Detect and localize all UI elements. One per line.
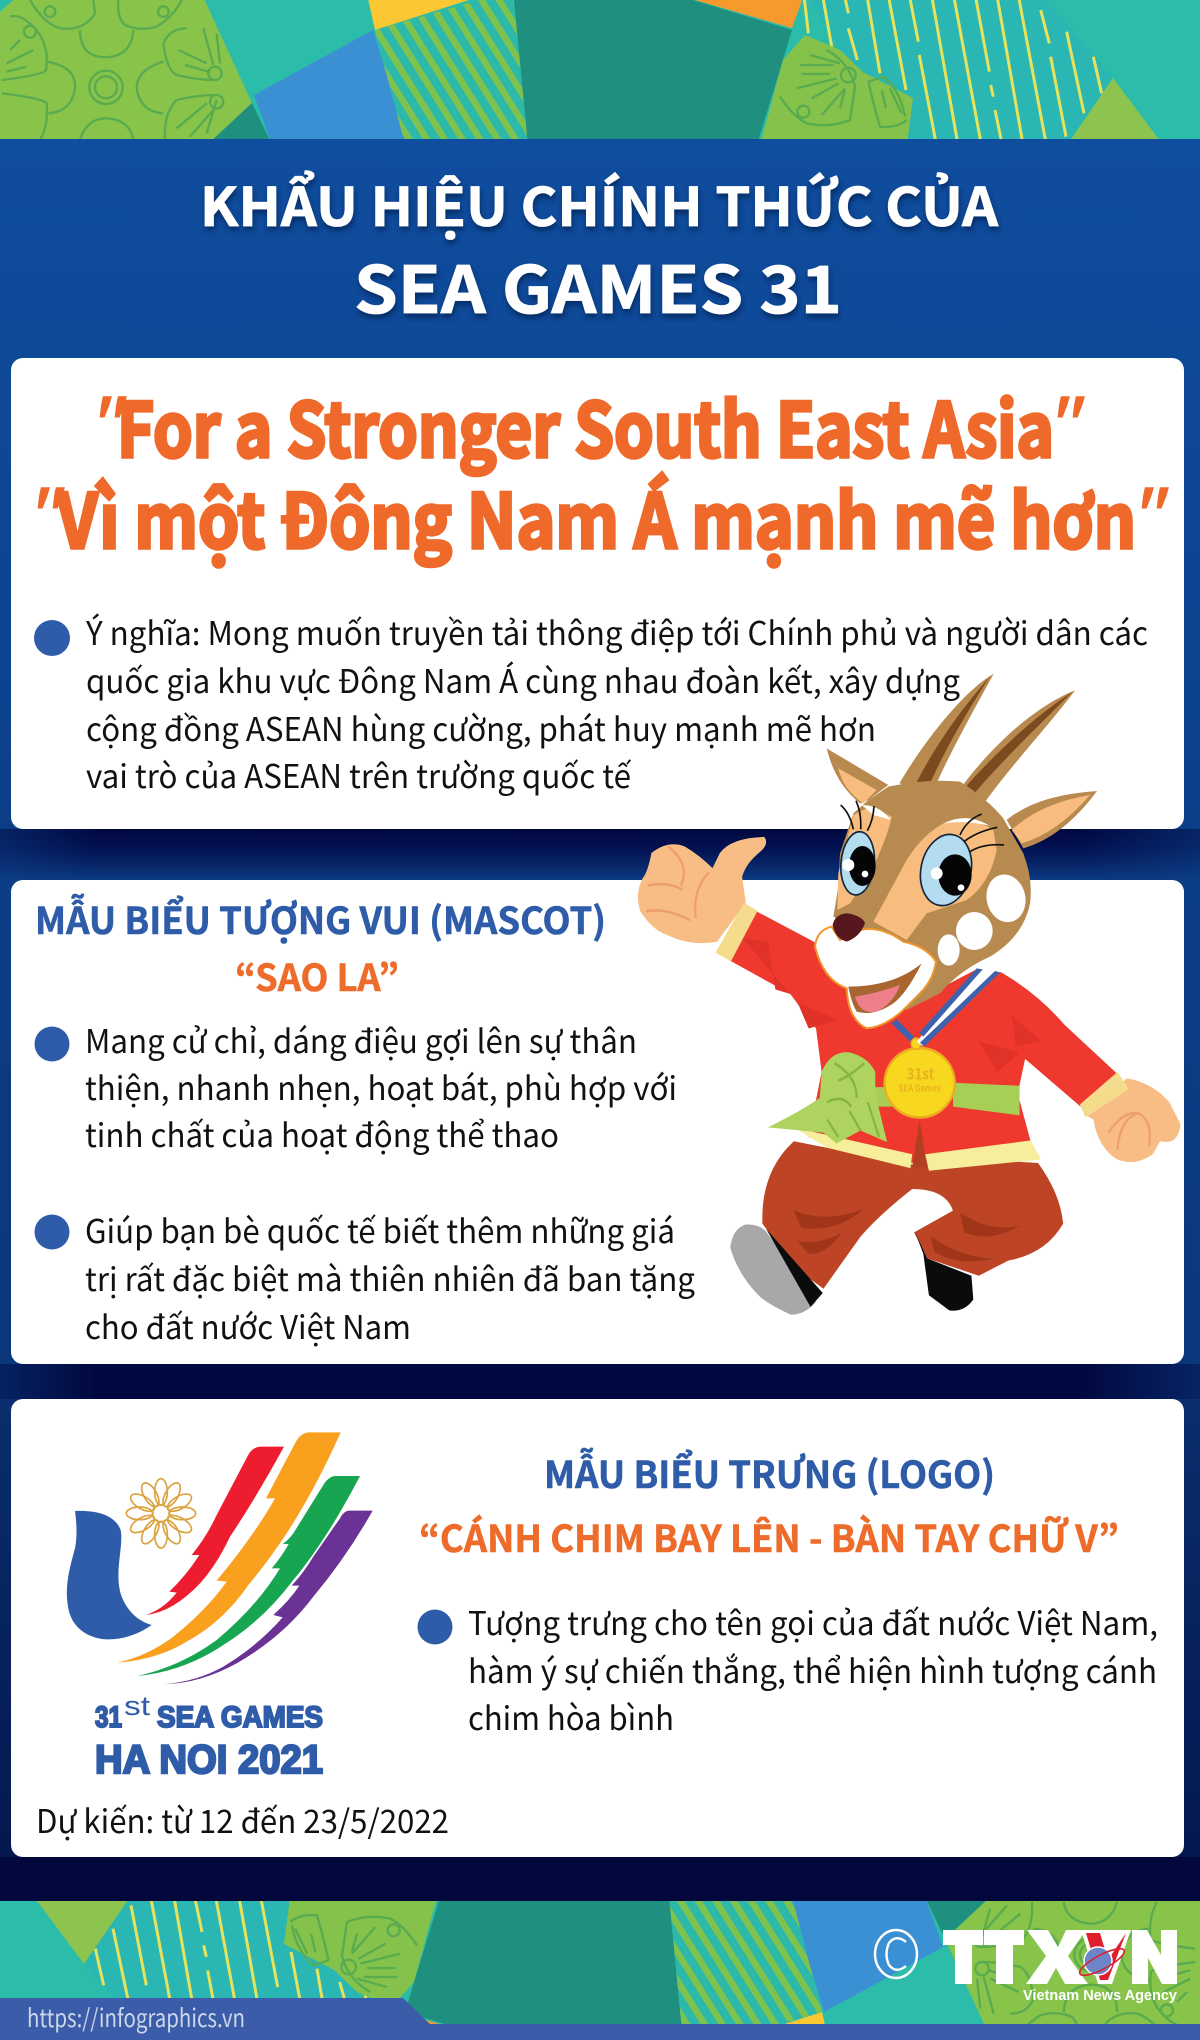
bottom footer strip xyxy=(0,1998,1200,2040)
bullet two xyxy=(34,1214,70,1250)
thumb-up hand xyxy=(638,837,766,943)
bullet two text: cho đất nước Việt Nam xyxy=(85,1302,411,1349)
logo heading: MẪU BIỂU TRƯNG (LOGO) xyxy=(544,1445,995,1499)
mouth xyxy=(848,963,922,1013)
medal text xyxy=(898,1063,941,1095)
meaning bullet xyxy=(34,620,70,656)
bullet one xyxy=(34,1026,70,1062)
slogan heading: " xyxy=(86,374,127,461)
source url: https://infographics.vn xyxy=(27,1999,245,2035)
hems xyxy=(794,1127,1041,1171)
title xyxy=(200,166,999,332)
slogan heading: For a Stronger South East Asia xyxy=(117,370,1054,479)
date note: Dự kiến: từ 12 đến 23/5/2022 xyxy=(36,1796,449,1843)
logo wordmark: 31 xyxy=(95,1701,122,1734)
right hand xyxy=(1086,1078,1180,1162)
slogan heading: " xyxy=(1044,374,1085,461)
logo name: “CÁNH CHIM BAY LÊN - BÀN TAY CHỮ V” xyxy=(419,1509,1119,1563)
shoes xyxy=(730,1224,816,1315)
mascot head xyxy=(815,748,1097,1047)
meaning text: Ý nghĩa: Mong muốn truyền tải thông điệp tới Chính phủ và người dân các xyxy=(85,608,1148,655)
slogan heading xyxy=(24,370,1169,570)
eyelashes xyxy=(841,801,1004,852)
ears xyxy=(827,748,888,803)
right cuff xyxy=(1080,1072,1129,1117)
logo bullet text: chim hòa bình xyxy=(468,1693,674,1740)
bullet one text xyxy=(85,1016,677,1157)
bullet two text xyxy=(85,1206,695,1349)
logo wordmark: SEA GAMES xyxy=(157,1701,323,1734)
nose xyxy=(833,913,865,942)
title: KHẨU HIỆU CHÍNH THỨC CỦA xyxy=(200,166,999,242)
logo bullet text xyxy=(468,1598,1158,1740)
left cuff xyxy=(715,903,758,961)
logo bullet xyxy=(418,1610,452,1644)
mascot body xyxy=(638,674,1180,1315)
panel: slogan xyxy=(11,358,1184,829)
medal xyxy=(885,1048,955,1117)
mascot illustration: Sao La xyxy=(638,674,1180,1315)
logo bullet text: Tượng trưng cho tên gọi của đất nước Việt Nam, xyxy=(468,1598,1158,1645)
bullet two text: trị rất đặc biệt mà thiên nhiên đã ban tặng xyxy=(85,1254,695,1301)
horns xyxy=(899,674,994,788)
ribbon xyxy=(917,968,1000,1047)
white spots xyxy=(982,871,1030,926)
face xyxy=(833,781,1031,1010)
green sash xyxy=(953,1083,1020,1115)
mascot name: “SAO LA” xyxy=(235,948,399,1002)
top decorative banner xyxy=(0,0,1200,150)
placket xyxy=(912,1120,927,1167)
bullet one text: thiện, nhanh nhẹn, hoạt bát, phù hợp với xyxy=(85,1063,677,1110)
logo bullet text: hàm ý sự chiến thắng, thể hiện hình tượng cánh xyxy=(468,1646,1157,1693)
logo mark xyxy=(67,1432,373,1684)
title: SEA GAMES 31 xyxy=(354,238,842,332)
slogan heading: " xyxy=(1128,465,1169,552)
slogan heading: " xyxy=(24,465,65,552)
logo wordmark xyxy=(95,1691,323,1782)
meaning text: quốc gia khu vực Đông Nam Á cùng nhau đoàn kết, xây dựng xyxy=(86,656,960,703)
meaning text: cộng đồng ASEAN hùng cường, phát huy mạnh mẽ hơn xyxy=(86,704,876,751)
TTXVN logo xyxy=(943,1930,1178,2004)
shirt xyxy=(727,911,1118,1163)
meaning text xyxy=(85,608,1148,798)
logo wordmark: st xyxy=(124,1691,151,1721)
bullet two text: Giúp bạn bè quốc tế biết thêm những giá xyxy=(85,1206,675,1253)
SEA Games 31 logo xyxy=(67,1432,373,1782)
bullet one text: tinh chất của hoạt động thể thao xyxy=(85,1110,559,1157)
panel: logo xyxy=(11,1399,1184,1857)
meaning text: vai trò của ASEAN trên trường quốc tế xyxy=(86,751,632,798)
copyright symbol xyxy=(875,1930,917,1978)
eyes xyxy=(838,830,877,896)
panel: mascot xyxy=(11,880,1184,1364)
agency name: Vietnam News Agency xyxy=(1023,1987,1178,2004)
tongue xyxy=(855,985,900,1012)
medal text: SEA Games xyxy=(898,1082,941,1095)
muzzle xyxy=(815,927,936,1028)
logo wordmark: HA NOI 2021 xyxy=(95,1738,323,1782)
trousers xyxy=(762,1141,1063,1289)
mascot heading: MẪU BIỂU TƯỢNG VUI (MASCOT) xyxy=(35,891,606,945)
medal text: 31st xyxy=(907,1063,934,1085)
bullet one text: Mang cử chỉ, dáng điệu gợi lên sự thân xyxy=(85,1016,637,1063)
bottom decorative banner xyxy=(0,1901,1200,2024)
